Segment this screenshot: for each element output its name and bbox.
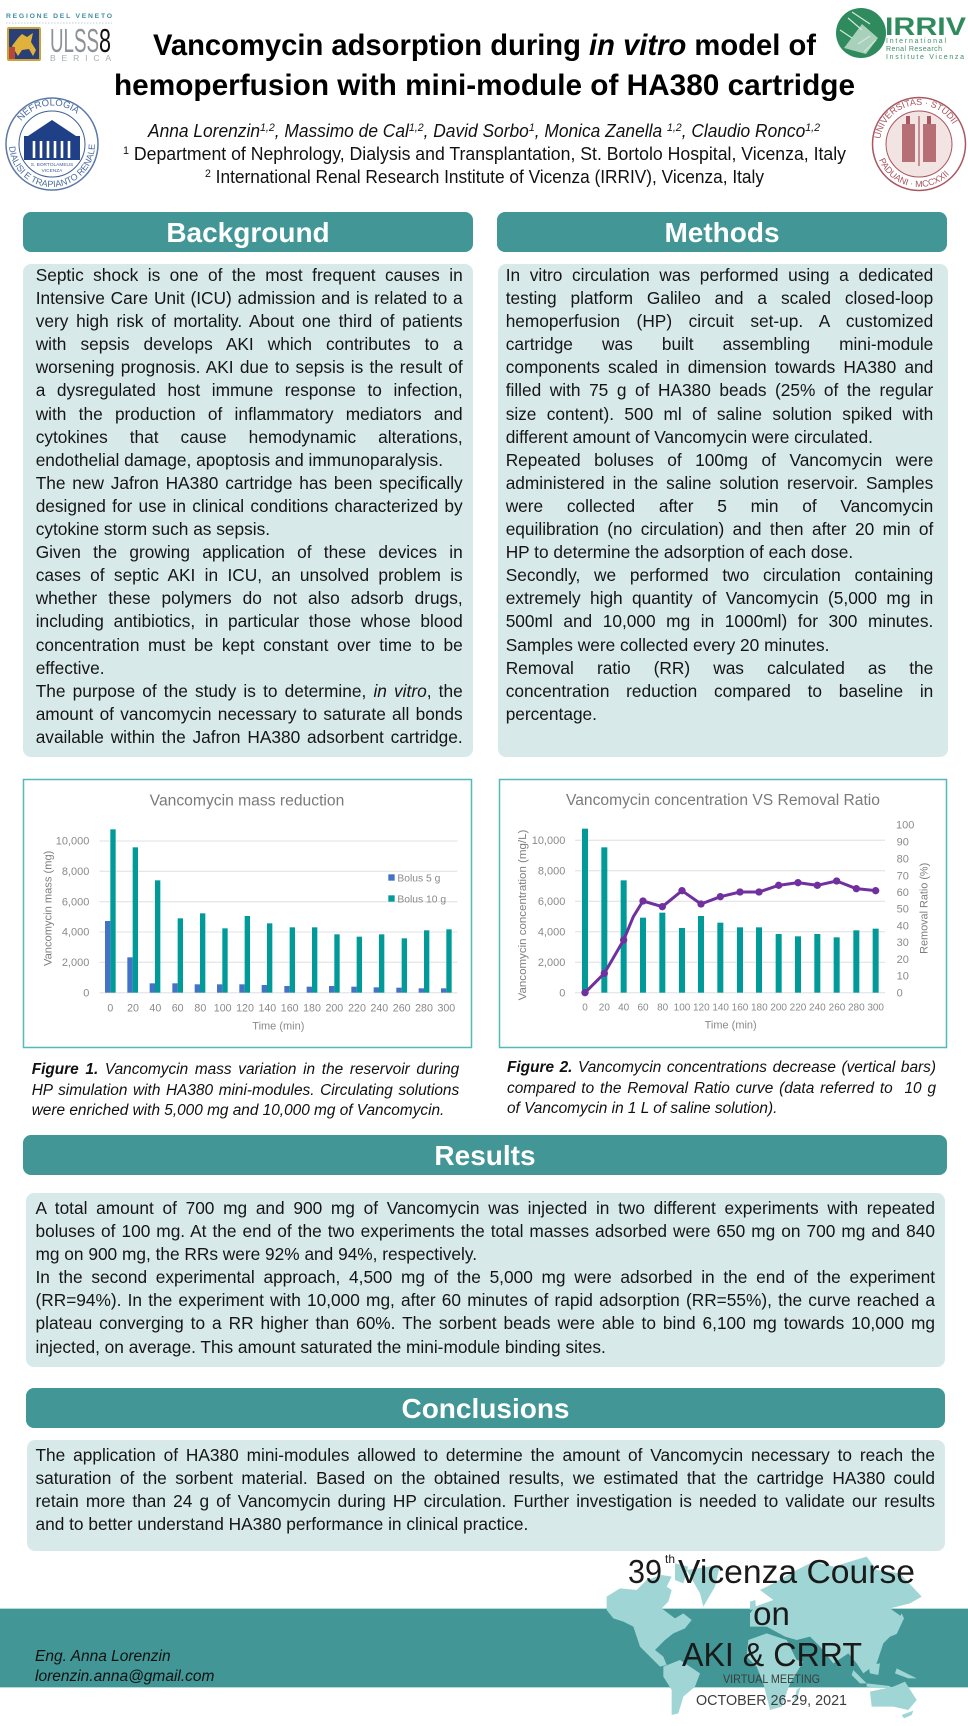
methods text: testing platform Galileo and a scaled closed-loop <box>506 288 933 308</box>
logo: IRRIV: Institute Vicenza <box>886 54 964 61</box>
logo: Regione del Veneto ULSS8 Berica: ULSS <box>50 22 99 59</box>
chart: Vancomycin concentration VS Removal Ratio: 0 <box>559 987 565 999</box>
logo: Nefrologia seal: VICENZA <box>42 168 63 174</box>
background text: worsening prognosis. AKI due to sepsis is the result of <box>36 357 463 377</box>
chart: Vancomycin mass reduction: 160 <box>281 1002 299 1014</box>
logo: IRRIV: International <box>886 38 946 45</box>
chart: Vancomycin concentration VS Removal Ratio: 60 <box>897 887 909 899</box>
chart: Vancomycin mass reduction: 0 <box>107 1002 113 1014</box>
caption: Figure 2: of Vancomycin in 1 L of saline solution). <box>507 1100 777 1117</box>
background text: concentration must be kept constant over time to be <box>36 634 463 654</box>
virtual meeting: VIRTUAL MEETING <box>723 1672 820 1686</box>
authors: , Claudio Ronco <box>682 121 805 141</box>
authors: 1,2 <box>409 122 424 134</box>
conclusions text: saturation of the sorbent material. Based on the obtained results, we estimated that the cartridge HA380 could <box>36 1468 935 1488</box>
heading: Results: Results <box>434 1140 536 1171</box>
logo: Nefrologia seal <box>5 97 99 191</box>
logo: Universitas Studii Paduani seal: UNIVERSITAS · STUDII <box>874 98 958 138</box>
affiliation 2: International Renal Research Institute of Vicenza (IRRIV), Vicenza, Italy <box>211 167 764 187</box>
background text: available within the Jafron HA380 adsorbent cartridge. <box>36 727 463 747</box>
authors: Anna Lorenzin <box>148 121 264 141</box>
chart: Vancomycin mass reduction: 80 <box>194 1002 206 1014</box>
title: Vancomycin adsorption during in vitro model of <box>153 29 817 62</box>
results text: plateau converging to a RR higher than 60%. The sorbent beads were able to bind 6,100 mg towards 10,000 mg <box>36 1313 935 1333</box>
background text: effective. <box>36 658 105 678</box>
affiliation 1: 1 <box>123 145 129 157</box>
dates: OCTOBER 26-29, 2021 <box>696 1692 847 1709</box>
logo: Nefrologia seal: S. BORTOLAMEUS <box>31 162 73 168</box>
heading: Conclusions: Conclusions <box>401 1393 570 1424</box>
methods text: Repeated boluses of 100mg of Vancomycin were <box>506 450 933 470</box>
methods text: filled with 75 g of HA380 beads (25% of the regular <box>506 380 933 400</box>
methods text: In vitro circulation was performed using a dedicated <box>506 265 933 285</box>
chart: Vancomycin concentration VS Removal Ratio: 120 <box>693 1003 710 1014</box>
chart: Vancomycin concentration VS Removal Ratio: 10 <box>897 971 909 983</box>
background text: cytokine storm such as sepsis. <box>36 519 270 539</box>
chart: Vancomycin mass reduction: 220 <box>348 1002 366 1014</box>
background text: designed for use in clinical conditions characterized by <box>36 496 463 516</box>
background text: very high risk of mortality. About one third of patients <box>36 311 463 331</box>
caption: Figure 1 <box>32 1061 459 1119</box>
authors: , David Sorbo <box>424 121 529 141</box>
authors: 1,2 <box>260 122 275 134</box>
methods text: equilibration (no circulation) and then after 20 min of <box>506 519 933 539</box>
chart: Vancomycin concentration VS Removal Ratio: 220 <box>790 1003 807 1014</box>
logo: Regione del Veneto ULSS8 Berica: BERICA <box>50 53 111 63</box>
chart: Vancomycin concentration VS Removal Ratio: 10,000 <box>532 835 565 847</box>
methods text: hemoperfusion (HP) circuit set-up. A customized <box>506 311 933 331</box>
caption: Figure 1: Figure 1. Vancomycin mass variation in the reservoir during <box>32 1061 459 1078</box>
header: title, authors and logos <box>5 8 966 192</box>
heading: Results <box>23 1135 947 1175</box>
methods text: Secondly, we performed two circulation containing <box>506 565 933 585</box>
chart: Vancomycin mass reduction: Bolus 5 g <box>397 873 441 884</box>
title: hemoperfusion with mini-module of HA380 cartridge <box>114 69 855 102</box>
logo: Regione del Veneto ULSS8 Berica: REGIONE DEL VENETO <box>6 13 112 20</box>
chart: Vancomycin mass reduction: 140 <box>258 1002 276 1014</box>
logo: IRRIV <box>836 8 966 61</box>
chart: Vancomycin mass reduction: Time (min) <box>252 1020 304 1032</box>
results text: mg on 900 mg, the RRs were 92% and 94%, respectively. <box>36 1244 477 1264</box>
authors: 1,2 <box>667 122 682 134</box>
chart: Vancomycin mass reduction: 200 <box>325 1002 343 1014</box>
course title: on <box>753 1595 790 1632</box>
methods text: Samples were collected every 20 minutes. <box>506 634 829 654</box>
conclusions text: The application of HA380 mini-modules allowed to determine the amount of Vancomycin necessary to reach the <box>36 1445 935 1465</box>
chart: Vancomycin mass reduction: 8,000 <box>62 866 89 878</box>
methods text: Removal ratio (RR) was calculated as the <box>506 658 933 678</box>
chart: Vancomycin concentration VS Removal Ratio: 0 <box>582 1003 588 1014</box>
chart: Vancomycin mass reduction: Vancomycin mass (mg) <box>42 851 54 966</box>
heading: Methods <box>497 212 947 252</box>
chart: Vancomycin concentration VS Removal Ratio: 6,000 <box>538 896 565 908</box>
chart: Vancomycin concentration VS Removal Ratio: 40 <box>897 920 909 932</box>
footer contact: Eng. Anna Lorenzin <box>35 1648 171 1665</box>
chart: Vancomycin concentration VS Removal Ratio: 2,000 <box>538 957 565 969</box>
methods text: percentage. <box>506 704 597 724</box>
background text: The new Jafron HA380 cartridge has been specifically <box>36 473 463 493</box>
caption: Figure 1: were enriched with 5,000 mg and 10,000 mg of Vancomycin. <box>32 1102 444 1119</box>
chart: Vancomycin mass reduction: 2,000 <box>62 957 89 969</box>
background text: amount of vancomycin necessary to saturate all bonds <box>36 704 463 724</box>
course title <box>628 1552 915 1673</box>
chart: Vancomycin concentration VS Removal Ratio: 140 <box>712 1003 729 1014</box>
course title: AKI & CRRT <box>682 1636 862 1673</box>
heading: Conclusions <box>26 1388 945 1428</box>
authors: 1 <box>529 122 535 134</box>
authors: , Massimo de Cal <box>275 121 410 141</box>
chart: Vancomycin mass reduction: 20 <box>127 1002 139 1014</box>
heading: Background <box>23 212 473 252</box>
chart: Vancomycin concentration VS Removal Ratio: Vancomycin concentration (mg/L) <box>517 830 529 1000</box>
chart: Vancomycin concentration VS Removal Ratio: 4,000 <box>538 926 565 938</box>
methods text: 500ml and 10,000 mg in 1000ml) for 300 minutes. <box>506 611 933 631</box>
chart: Vancomycin mass reduction: 180 <box>303 1002 321 1014</box>
chart: Vancomycin concentration VS Removal Ratio: 8,000 <box>538 865 565 877</box>
background text: including antibiotics, in particular those whose blood <box>36 611 463 631</box>
chart: Vancomycin mass reduction: Bolus 10 g <box>397 894 446 905</box>
course title: th <box>665 1552 675 1566</box>
background text: cases of septic AKI in ICU, an unsolved problem is <box>36 565 463 585</box>
chart: Vancomycin concentration VS Removal Ratio: 280 <box>848 1003 865 1014</box>
logo: Universitas Studii Paduani seal: PADUANI · MCCXXII <box>879 158 949 187</box>
chart: Vancomycin concentration VS Removal Ratio: 200 <box>770 1003 787 1014</box>
chart: Vancomycin mass reduction: 4,000 <box>62 927 89 939</box>
methods text: administered in the saline solution reservoir. Samples <box>506 473 933 493</box>
chart: Vancomycin mass reduction: 10,000 <box>56 836 89 848</box>
panel: background <box>23 264 473 757</box>
background text: whether these polymers do not also adsorb drugs, <box>36 588 463 608</box>
results text <box>36 1198 935 1357</box>
methods text: were collected after 5 min of Vancomycin <box>506 496 933 516</box>
icon: world map <box>607 1557 922 1718</box>
footer band <box>0 1608 968 1688</box>
methods text: different amount of Vancomycin were circulated. <box>506 427 873 447</box>
authors: 1,2 <box>805 122 820 134</box>
chart: Vancomycin concentration VS Removal Ratio: 60 <box>637 1003 649 1014</box>
chart: Vancomycin concentration VS Removal Ratio: 90 <box>897 837 909 849</box>
course title: Vicenza Course <box>678 1553 915 1590</box>
conclusions text: and to better understand HA380 performance in clinical practice. <box>36 1514 528 1534</box>
background text: endothelial damage, apoptosis and immunoparalysis. <box>36 450 443 470</box>
heading: Methods: Methods <box>664 217 780 248</box>
panel: conclusions <box>27 1440 945 1551</box>
chart: Vancomycin concentration VS Removal Ratio: 160 <box>732 1003 749 1014</box>
chart: Vancomycin mass reduction: 280 <box>415 1002 433 1014</box>
chart: Vancomycin concentration VS Removal Ratio: 260 <box>829 1003 846 1014</box>
chart: Vancomycin concentration VS Removal Ratio: 40 <box>618 1003 630 1014</box>
results text: injected, on average. This amount saturated the mini-module binding sites. <box>36 1337 606 1357</box>
chart: Vancomycin concentration VS Removal Ratio: 300 <box>867 1003 884 1014</box>
chart: Vancomycin concentration VS Removal Ratio: 20 <box>599 1003 610 1014</box>
chart: Vancomycin mass reduction: 120 <box>236 1002 254 1014</box>
chart: Vancomycin concentration VS Removal Ratio: 30 <box>897 937 909 949</box>
chart: Vancomycin concentration VS Removal Ratio: Vancomycin concentration VS Removal Ratio <box>566 792 880 809</box>
logo: Regione del Veneto ULSS8 Berica: 8 <box>99 22 111 59</box>
chart: Vancomycin concentration VS Removal Ratio: Removal Ratio (%) <box>919 863 931 954</box>
panel: results <box>26 1193 945 1367</box>
background text <box>36 265 463 747</box>
panel: methods <box>498 264 948 757</box>
background text: a dysregulated host immune response to infection, <box>36 380 463 400</box>
chart: Vancomycin concentration VS Removal Ratio: 80 <box>897 853 909 865</box>
affiliation 2: 2 <box>205 168 211 180</box>
authors: , Monica Zanella <box>535 121 667 141</box>
caption: Figure 2 <box>507 1059 936 1117</box>
results text: A total amount of 700 mg and 900 mg of Vancomycin was injected in two different experiments with repeated <box>36 1198 935 1218</box>
heading: Background: Background <box>166 217 330 248</box>
methods text: components scaled in dimension towards HA380 and <box>506 357 933 377</box>
chart: Vancomycin concentration VS Removal Ratio: Time (min) <box>705 1020 757 1032</box>
logo: IRRIV: Renal Research <box>886 46 942 53</box>
methods text: cartridge was built assembling mini-module <box>506 334 933 354</box>
chart: Vancomycin concentration VS Removal Ratio: 20 <box>897 954 909 966</box>
chart: Vancomycin mass reduction: Vancomycin mass reduction <box>150 793 344 810</box>
chart: Vancomycin mass reduction: 0 <box>83 987 89 999</box>
footer contact: lorenzin.anna@gmail.com <box>35 1668 214 1685</box>
chart: Vancomycin mass reduction: 260 <box>393 1002 411 1014</box>
chart: Vancomycin mass reduction: 300 <box>437 1002 455 1014</box>
logo: Universitas Studii Paduani seal <box>872 96 966 192</box>
caption: Figure 2: Figure 2. Vancomycin concentrations decrease (vertical bars) <box>507 1059 936 1076</box>
background text: Given the growing application of these devices in <box>36 542 463 562</box>
chart: Vancomycin concentration VS Removal Ratio: 100 <box>896 820 914 832</box>
chart: Vancomycin mass reduction: 6,000 <box>62 896 89 908</box>
affiliation 1: Department of Nephrology, Dialysis and Transplantation, St. Bortolo Hospital, Vicenza, Italy <box>129 144 846 164</box>
caption: Figure 2: compared to the Removal Ratio curve (data referred to 10 g <box>507 1080 936 1097</box>
background text: The purpose of the study is to determine, in vitro, the <box>36 681 463 701</box>
background text: with sepsis develops AKI which contributes to a <box>36 334 463 354</box>
chart: Vancomycin concentration VS Removal Ratio: 0 <box>897 987 903 999</box>
chart: Vancomycin concentration VS Removal Ratio: 50 <box>897 904 909 916</box>
footer contact <box>35 1648 214 1685</box>
methods text: size content). 500 ml of saline solution spiked with <box>506 404 933 424</box>
chart: Vancomycin mass reduction: 240 <box>370 1002 388 1014</box>
results text: (RR=94%). In the experiment with 10,000 mg, after 60 minutes of rapid adsorption (RR=55%), the curve reached a <box>36 1290 935 1310</box>
background text: Septic shock is one of the most frequent causes in <box>36 265 463 285</box>
logo: Nefrologia seal: DIALISI E TRAPIANTO RENALE <box>9 144 95 187</box>
chart: Vancomycin concentration VS Removal Ratio: 180 <box>751 1003 768 1014</box>
methods text: HP to determine the adsorption of each dose. <box>506 542 853 562</box>
chart: Vancomycin mass reduction: 40 <box>149 1002 161 1014</box>
chart: Vancomycin mass reduction: 60 <box>172 1002 184 1014</box>
methods text: concentration reduction compared to baseline in <box>506 681 933 701</box>
caption: Figure 1: HP simulation with HA380 mini-modules. Circulating solutions <box>32 1082 459 1099</box>
results text: In the second experimental approach, 4,500 mg of the 5,000 mg were adsorbed in the end of the experiment <box>36 1267 935 1287</box>
methods text <box>506 265 934 724</box>
chart: Vancomycin concentration VS Removal Ratio: 80 <box>657 1003 669 1014</box>
conclusions text: retain more than 24 g of Vancomycin during HP circulation. Further investigation is needed to validate our results <box>36 1491 935 1511</box>
logo: Nefrologia seal: NEFROLOGIA <box>16 99 78 121</box>
background text: cytokines that cause hemodynamic alterations, <box>36 427 463 447</box>
background text: Intensive Care Unit (ICU) admission and is related to a <box>36 288 463 308</box>
chart: Vancomycin concentration VS Removal Ratio: 240 <box>809 1003 826 1014</box>
chart: Vancomycin mass reduction: 100 <box>214 1002 232 1014</box>
results text: boluses of 100 mg. At the end of the two experiments the total masses adsorbed were 650 mg on 700 mg and 840 <box>36 1221 935 1241</box>
methods text: extremely high quantity of Vancomycin (5,000 mg in <box>506 588 933 608</box>
logo: IRRIV: IRRIV <box>885 13 966 41</box>
conclusions text <box>36 1445 935 1534</box>
background text: with the production of inflammatory mediators and <box>36 404 463 424</box>
course title: 39 <box>628 1553 662 1590</box>
chart: Vancomycin concentration VS Removal Ratio: 100 <box>674 1003 691 1014</box>
logo: Regione del Veneto ULSS8 Berica <box>6 13 112 63</box>
title <box>114 29 855 102</box>
chart: Vancomycin concentration VS Removal Ratio: 70 <box>897 870 909 882</box>
